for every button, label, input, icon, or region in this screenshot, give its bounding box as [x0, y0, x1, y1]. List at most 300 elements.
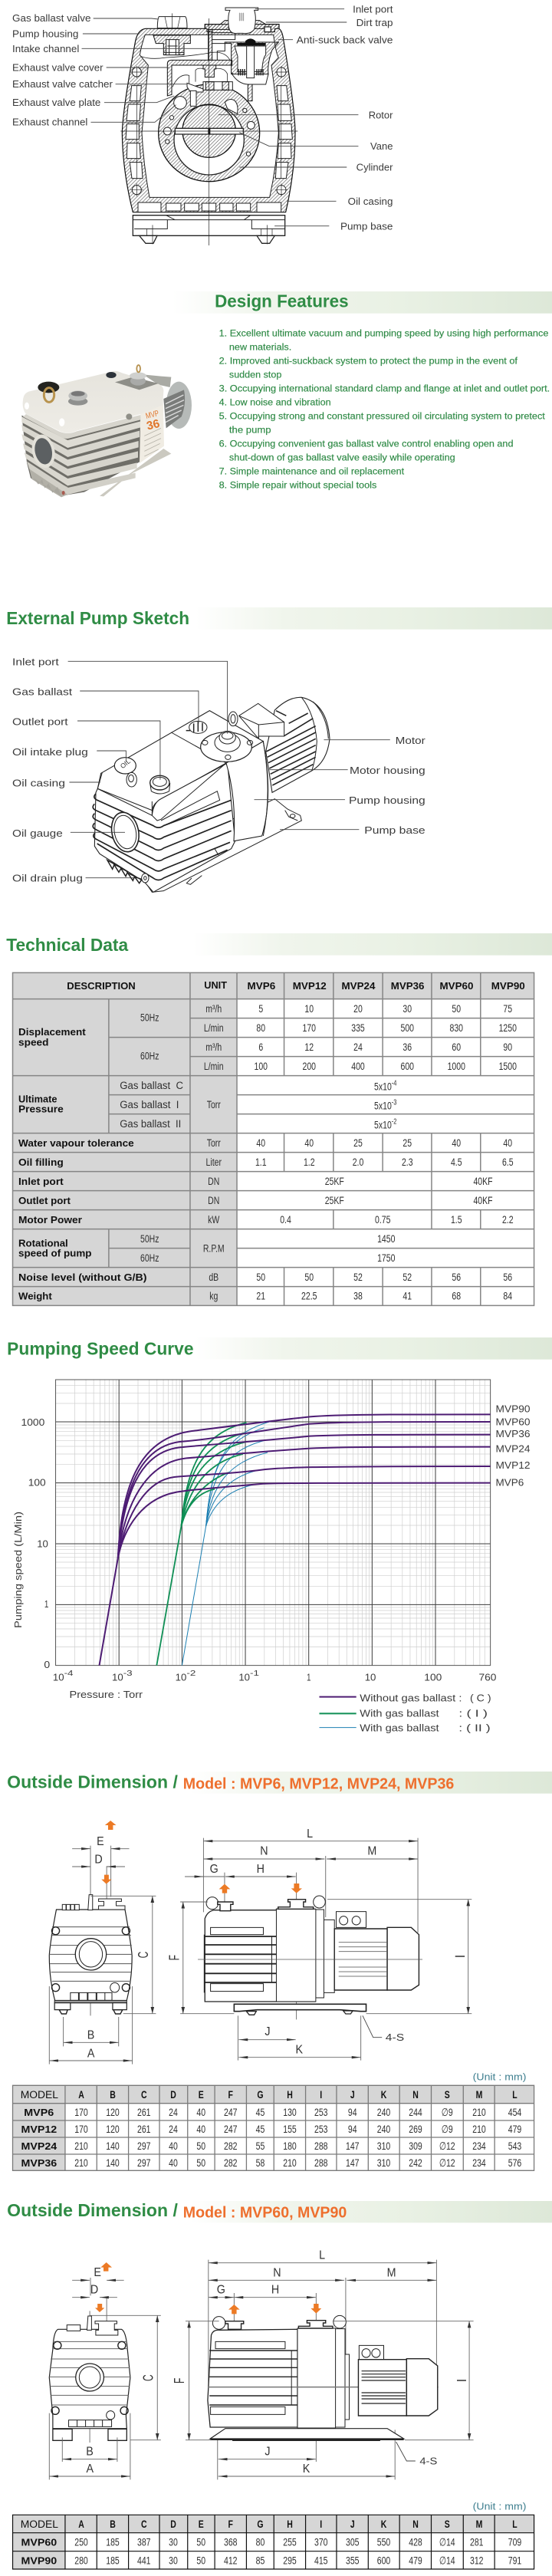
- legend: ( C ): [470, 1693, 491, 1704]
- data rows: 22.5: [301, 1290, 317, 1302]
- right part labels: [297, 5, 393, 232]
- row MVP6: 253: [314, 2107, 328, 2118]
- header row: J: [350, 2518, 355, 2530]
- row MVP24: 40: [169, 2140, 178, 2152]
- row labels: speed: [18, 1038, 49, 1048]
- row MVP60: 281: [470, 2536, 484, 2548]
- x axis ticks: [53, 1669, 497, 1683]
- curves: with gas ballast II: [182, 1421, 271, 1666]
- row MVP12: 40: [196, 2124, 205, 2135]
- data rows: -4: [392, 1079, 397, 1087]
- row MVP6: 24: [169, 2107, 178, 2118]
- row MVP6: 40: [196, 2107, 205, 2118]
- right part labels: Oil casing: [348, 196, 393, 207]
- photo: vacuum pump MVP36: 36: [146, 417, 161, 433]
- data rows: 25: [402, 1137, 412, 1149]
- data rows: 52: [402, 1272, 412, 1283]
- row MVP90: 600: [377, 2555, 390, 2567]
- dimensions: side view: N: [273, 2266, 281, 2280]
- data rows: 56: [452, 1272, 461, 1283]
- curve model labels: MVP36: [496, 1429, 531, 1439]
- row MVP6: 170: [74, 2107, 88, 2118]
- dimensions: side view: L: [307, 1827, 313, 1841]
- row MVP6: 45: [256, 2107, 264, 2118]
- data rows: 36: [402, 1041, 412, 1053]
- row MVP6: 240: [377, 2107, 390, 2118]
- panel: legend and pressure label: [7, 1689, 552, 2064]
- drawing: front view MVP60-90: [49, 2278, 130, 2443]
- data rows: 1.5: [451, 1214, 462, 1225]
- dimensions: side view: 4-S: [386, 2032, 404, 2043]
- table grid: [13, 2085, 534, 2170]
- x axis ticks: 10: [53, 1673, 64, 1683]
- legend: : ( I ): [458, 1709, 488, 1719]
- table: MVP60-90 values: [21, 2518, 521, 2567]
- right labels: Motor housing: [350, 765, 426, 776]
- row MVP90: 85: [256, 2555, 264, 2567]
- dimensions: front view: E: [97, 1834, 104, 1848]
- row MVP36: 140: [106, 2157, 120, 2169]
- header row: S: [445, 2518, 450, 2530]
- right part labels: Rotor: [369, 110, 393, 121]
- data rows: DN: [208, 1195, 219, 1206]
- row MVP12: ∅9: [442, 2124, 453, 2135]
- row MVP24: 309: [409, 2140, 422, 2152]
- row labels: Weight: [18, 1291, 52, 1302]
- header row: L: [512, 2089, 518, 2101]
- curve model labels: MVP6: [496, 1478, 524, 1489]
- row MVP36: 210: [283, 2157, 297, 2169]
- row MVP60: 50: [196, 2536, 205, 2548]
- row MVP60: 709: [508, 2536, 521, 2548]
- data rows: 40KF: [473, 1195, 493, 1206]
- data rows: 50: [452, 1003, 461, 1015]
- row MVP90: 791: [508, 2555, 521, 2567]
- data rows: 10: [304, 1003, 314, 1015]
- heading: External Pump Sketch: External Pump Sketch: [6, 608, 189, 628]
- data rows: 40: [304, 1137, 314, 1149]
- header row: M: [476, 2089, 482, 2101]
- row MVP90: 185: [106, 2555, 120, 2567]
- left part labels: [12, 13, 113, 128]
- row MVP36: 288: [314, 2157, 328, 2169]
- row MVP12: 253: [314, 2124, 328, 2135]
- row MVP60: 550: [377, 2536, 390, 2548]
- header row: C: [141, 2518, 147, 2530]
- row MVP12: 120: [106, 2124, 120, 2135]
- curves: without gas ballast C: [99, 1414, 491, 1666]
- header row: A: [78, 2518, 84, 2530]
- data rows: dB: [209, 1272, 219, 1283]
- x axis ticks: -1: [250, 1669, 259, 1677]
- dimensions: front view: [49, 1834, 156, 2064]
- data rows: 40KF: [473, 1176, 493, 1187]
- data rows: 84: [503, 1290, 512, 1302]
- row MVP24: 234: [472, 2140, 486, 2152]
- dimensions: side view: K: [296, 2043, 303, 2057]
- row MVP60: 305: [346, 2536, 360, 2548]
- row MVP60: [21, 2536, 521, 2548]
- row MVP36: 147: [346, 2157, 360, 2169]
- x axis ticks: 10: [365, 1673, 376, 1683]
- data rows: 68: [452, 1290, 461, 1302]
- data rows: m³/h: [205, 1041, 222, 1053]
- right part labels: Cylinder: [356, 163, 393, 173]
- right labels: Pump base: [364, 825, 426, 836]
- row MVP6: 261: [137, 2107, 151, 2118]
- row MVP12: 247: [224, 2124, 238, 2135]
- curves: with gas ballast I: [156, 1423, 246, 1666]
- data rows: -2: [392, 1117, 397, 1126]
- row MVP36: 576: [508, 2157, 521, 2169]
- dimensions: front view: B: [87, 2028, 94, 2042]
- drawing: front view MVP6-36: [49, 1846, 132, 2015]
- dimensions: front view: A: [87, 2462, 94, 2476]
- row MVP6: 244: [409, 2107, 422, 2118]
- data rows: 600: [400, 1061, 414, 1072]
- header row: F: [228, 2089, 233, 2101]
- data rows: 1000: [448, 1061, 465, 1072]
- row MVP6: MVP6: [24, 2108, 54, 2118]
- left labels: Oil gauge: [12, 828, 63, 839]
- data rows: 75: [503, 1003, 512, 1015]
- dimensions: side view: J: [264, 2445, 271, 2459]
- row MVP24: 210: [74, 2140, 88, 2152]
- row MVP24: 50: [196, 2140, 205, 2152]
- dimensions: front view: D: [90, 2283, 98, 2297]
- header row: C: [141, 2089, 147, 2101]
- legend: Without gas ballast :: [360, 1693, 462, 1704]
- row MVP60: 30: [169, 2536, 178, 2548]
- sub-row labels: 50Hz: [140, 1233, 159, 1245]
- data rows: 1.1: [255, 1156, 267, 1168]
- row labels: Noise level (without G/B): [18, 1273, 147, 1283]
- data rows: 830: [449, 1022, 463, 1034]
- header row: K: [381, 2518, 386, 2530]
- heading: Outside Dimension MVP6-36: Outside Dimension /: [7, 1772, 178, 1792]
- row labels: Pressure: [18, 1104, 64, 1115]
- header row: J: [350, 2089, 355, 2101]
- data rows: 1500: [499, 1061, 517, 1072]
- row labels: Ultimate: [18, 1094, 58, 1105]
- x axis ticks: -3: [123, 1669, 133, 1677]
- row MVP24: 310: [377, 2140, 390, 2152]
- sub-row labels: Gas ballast I: [120, 1099, 179, 1110]
- row MVP60: 387: [137, 2536, 151, 2548]
- row MVP90: 280: [74, 2555, 88, 2567]
- row MVP6: ∅9: [442, 2107, 453, 2118]
- header row: G: [257, 2089, 264, 2101]
- left part labels: Exhaust valve plate: [12, 97, 100, 108]
- header row: E: [199, 2089, 204, 2101]
- curve model labels: MVP12: [496, 1460, 531, 1471]
- heading: Technical Data: Technical Data: [6, 935, 129, 955]
- row MVP12: 155: [283, 2124, 297, 2135]
- heading band: [196, 1337, 552, 1360]
- row MVP90: MVP90: [21, 2556, 57, 2567]
- photo: vacuum pump MVP36: MVP: [145, 409, 160, 421]
- row MVP36: [21, 2157, 521, 2169]
- row labels: Rotational: [18, 1239, 68, 1249]
- photo: vacuum pump MVP36: [21, 365, 192, 497]
- row labels: [18, 1028, 147, 1302]
- data rows: 25: [353, 1137, 363, 1149]
- header row: MVP60: [440, 982, 474, 992]
- row MVP60: 368: [224, 2536, 238, 2548]
- row MVP24: ∅12: [439, 2140, 455, 2152]
- row MVP60: 250: [74, 2536, 88, 2548]
- data rows: 400: [351, 1061, 365, 1072]
- row MVP24: 147: [346, 2140, 360, 2152]
- row labels: Water vapour tolerance: [18, 1139, 134, 1149]
- left part labels: Exhaust channel: [12, 117, 87, 128]
- data rows: 1250: [499, 1022, 517, 1034]
- data rows: 50: [304, 1272, 314, 1283]
- row MVP24: 180: [283, 2140, 297, 2152]
- row MVP6: 210: [472, 2107, 486, 2118]
- x axis ticks: 100: [424, 1673, 442, 1683]
- header row: D: [170, 2518, 176, 2530]
- header row: L: [512, 2518, 518, 2530]
- x axis ticks: 10: [176, 1673, 187, 1683]
- data rows: 30: [402, 1003, 412, 1015]
- row MVP90: [21, 2555, 521, 2567]
- data rows: -3: [392, 1098, 397, 1107]
- header row: [67, 981, 525, 992]
- dimensions: side view: F: [172, 2378, 188, 2384]
- unit note: (Unit : mm): [473, 2502, 526, 2512]
- left labels: Inlet port: [12, 657, 59, 668]
- heading: Pumping Speed Curve: Pumping Speed Curve: [7, 1339, 194, 1359]
- row MVP12: [21, 2124, 521, 2135]
- dimensions: front view: D: [94, 1853, 103, 1867]
- data rows: 2.2: [502, 1214, 514, 1225]
- right part labels: Anti-suck back valve: [297, 35, 393, 46]
- data rows: 335: [351, 1022, 365, 1034]
- header row: MVP90: [491, 982, 525, 992]
- data rows: L/min: [204, 1061, 224, 1072]
- dimensions: front view: C: [136, 1952, 152, 1958]
- data rows: 2.0: [353, 1156, 363, 1168]
- row MVP12: 94: [348, 2124, 357, 2135]
- row labels: speed of pump: [18, 1249, 91, 1259]
- right part labels: Vane: [370, 141, 393, 152]
- row MVP24: 543: [508, 2140, 521, 2152]
- drawing: external pump line art: OIL: [119, 757, 132, 770]
- sub-row labels: 50Hz: [140, 1012, 159, 1024]
- data rows: m³/h: [205, 1003, 222, 1015]
- data rows: 5x10: [374, 1100, 392, 1112]
- heading band: [190, 2201, 552, 2222]
- row MVP36: ∅12: [439, 2157, 455, 2169]
- left part labels: Intake channel: [12, 44, 79, 54]
- row MVP90: 355: [346, 2555, 360, 2567]
- heading band: [190, 1772, 552, 1794]
- curve model labels: MVP90: [496, 1404, 531, 1415]
- x axis ticks: -2: [186, 1669, 196, 1677]
- data rows: kW: [208, 1214, 220, 1225]
- header row: G: [257, 2518, 264, 2530]
- heading and feature list: [172, 291, 552, 491]
- row MVP6: 130: [283, 2107, 297, 2118]
- data rows: 100: [254, 1061, 268, 1072]
- table: technical data values: [18, 981, 525, 1302]
- feature list: 8. Simple repair without special tools: [219, 481, 376, 491]
- header row: I: [320, 2089, 322, 2101]
- y axis ticks: [21, 1417, 50, 1670]
- data rows: 170: [302, 1022, 316, 1034]
- data rows: 4.5: [451, 1156, 462, 1168]
- panel: outside dimension drawing MVP60-90: [13, 2249, 534, 2569]
- header row: [21, 2518, 518, 2530]
- left labels: Gas ballast: [12, 687, 73, 698]
- right part labels: Dirt trap: [356, 18, 393, 28]
- dimensions: side view: J: [264, 2025, 271, 2038]
- legend: With gas ballast: [360, 1709, 439, 1719]
- row labels: Motor Power: [18, 1216, 83, 1225]
- data rows: Liter: [206, 1156, 222, 1168]
- drawing: cross-section line art: [120, 8, 297, 245]
- row MVP24: 55: [256, 2140, 264, 2152]
- leader lines: [68, 661, 390, 878]
- row MVP60: MVP60: [21, 2538, 57, 2548]
- row MVP24: 282: [224, 2140, 238, 2152]
- data rows: 90: [503, 1041, 512, 1053]
- left labels: Outlet port: [12, 717, 68, 728]
- heading: Outside Dimension MVP60-90: [7, 2200, 347, 2221]
- legend: [319, 1693, 491, 1734]
- x axis ticks: 1: [307, 1673, 310, 1683]
- left labels: [12, 657, 88, 884]
- leader lines and part labels: [12, 5, 393, 232]
- row MVP36: 58: [256, 2157, 264, 2169]
- data rows: 52: [353, 1272, 363, 1283]
- header row: M: [476, 2518, 482, 2530]
- data rows: 6: [258, 1041, 263, 1053]
- data rows: Torr: [207, 1137, 221, 1149]
- header row: H: [287, 2518, 293, 2530]
- header row: DESCRIPTION: [67, 982, 136, 992]
- data rows: 38: [353, 1290, 363, 1302]
- row MVP90: 50: [196, 2555, 205, 2567]
- row MVP60: 185: [106, 2536, 120, 2548]
- row MVP90: 441: [137, 2555, 151, 2567]
- data rows: Torr: [207, 1099, 221, 1110]
- header row: K: [381, 2089, 386, 2101]
- curve model labels: MVP24: [496, 1444, 531, 1455]
- data rows: 40: [256, 1137, 265, 1149]
- row MVP12: 210: [472, 2124, 486, 2135]
- row MVP60: 80: [256, 2536, 264, 2548]
- y axis title: Pumping speed (L/Min): [12, 1512, 24, 1628]
- row MVP90: 312: [470, 2555, 484, 2567]
- left part labels: Gas ballast valve: [12, 13, 90, 24]
- data rows: 12: [304, 1041, 314, 1053]
- data rows: [203, 1003, 517, 1302]
- row MVP12: MVP12: [21, 2125, 57, 2135]
- row MVP6: 94: [348, 2107, 357, 2118]
- row MVP24: MVP24: [21, 2142, 58, 2152]
- table grid: [13, 2515, 534, 2569]
- data rows: L/min: [204, 1022, 224, 1034]
- heading band: [196, 607, 552, 630]
- dimensions: side view: M: [367, 1844, 376, 1858]
- header row: MODEL: [21, 2089, 58, 2101]
- dimensions: front view: [49, 2265, 161, 2479]
- row MVP24: 140: [106, 2140, 120, 2152]
- x axis title: Pressure : Torr: [69, 1689, 143, 1700]
- panel: dimension table MVP6-36: [7, 2072, 552, 2222]
- dimensions: side view: K: [303, 2462, 310, 2476]
- dimensions: side view: F: [167, 1955, 182, 1960]
- feature list: 7. Simple maintenance and oil replacement: [219, 467, 404, 477]
- data rows: 24: [353, 1041, 363, 1053]
- data rows: 25KF: [325, 1176, 344, 1187]
- data rows: 200: [302, 1061, 316, 1072]
- data rows: 6.5: [502, 1156, 514, 1168]
- row MVP60: 255: [283, 2536, 297, 2548]
- heading band: [172, 291, 552, 314]
- data rows: 21: [256, 1290, 265, 1302]
- header row: N: [412, 2518, 419, 2530]
- dimensions: front view: C: [141, 2374, 156, 2381]
- row MVP36: MVP36: [21, 2159, 57, 2169]
- left part labels: Exhaust valve cover: [12, 63, 104, 74]
- dimensions: front view: A: [87, 2047, 95, 2061]
- data rows: 500: [400, 1022, 414, 1034]
- left labels: Oil intake plug: [12, 747, 88, 758]
- sub-row labels: Gas ballast C: [120, 1080, 183, 1091]
- row MVP24: 288: [314, 2140, 328, 2152]
- heading: Outside Dimension MVP6-36: [7, 1772, 454, 1793]
- table grid: [13, 972, 534, 1305]
- data rows: 80: [256, 1022, 265, 1034]
- data rows: 1.2: [304, 1156, 315, 1168]
- header row: B: [110, 2518, 116, 2530]
- data rows: 25KF: [325, 1195, 344, 1206]
- heading: Outside Dimension MVP60-90: Outside Dimension /: [7, 2200, 178, 2220]
- y axis ticks: 10: [37, 1539, 48, 1550]
- header row: N: [412, 2089, 419, 2101]
- header row: UNIT: [204, 981, 227, 991]
- y axis ticks: 100: [28, 1478, 46, 1489]
- left labels: Oil casing: [12, 778, 65, 789]
- dimensions: side view: G: [210, 1862, 219, 1876]
- table: MVP6-36 values: [21, 2089, 521, 2169]
- data rows: kg: [209, 1290, 218, 1302]
- dimensions: side view: H: [257, 1862, 264, 1876]
- right labels: Motor: [396, 735, 426, 746]
- data rows: R.P.M: [203, 1242, 225, 1255]
- feature list: 4. Low noise and vibration: [219, 398, 331, 408]
- row MVP12: 269: [409, 2124, 422, 2135]
- row MVP12: 24: [169, 2124, 178, 2135]
- right labels: [349, 735, 426, 836]
- row MVP90: 415: [314, 2555, 328, 2567]
- icons: inlet and outlet flow arrows, side view: [228, 2304, 321, 2314]
- row MVP6: 247: [224, 2107, 238, 2118]
- curve model labels: MVP60: [496, 1417, 531, 1428]
- data rows: 1450: [377, 1233, 396, 1245]
- row MVP12: 479: [508, 2124, 521, 2135]
- header row: I: [320, 2518, 322, 2530]
- row MVP6: 454: [508, 2107, 521, 2118]
- data rows: 56: [503, 1272, 512, 1283]
- header row: MODEL: [21, 2518, 58, 2530]
- data rows: 20: [353, 1003, 363, 1015]
- data rows: 1750: [377, 1252, 396, 1264]
- curve model labels: [496, 1404, 531, 1489]
